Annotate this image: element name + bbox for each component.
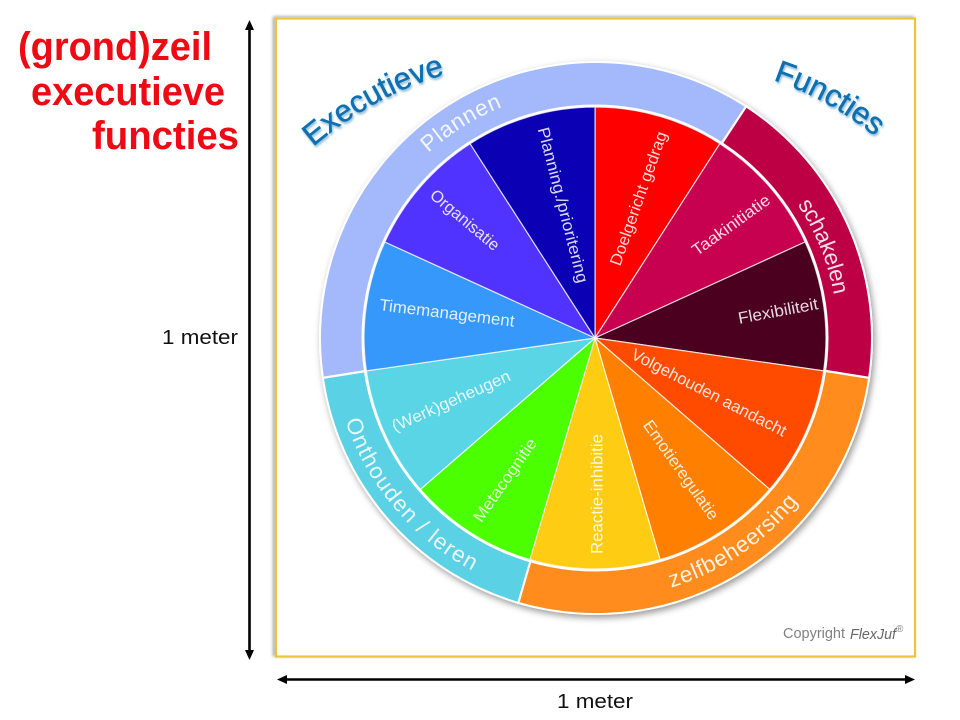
copyright: FlexJuf — [850, 626, 898, 643]
ring text: zelfbeheersing: zelfbeheersing — [668, 495, 800, 588]
segment: Reactie-inhibitie — [530, 338, 660, 569]
outer ring: zelfbeheersing — [518, 371, 868, 613]
arrow: vertical 1 meter — [245, 20, 254, 660]
segment: (Werk)geheugen — [366, 338, 595, 489]
text: Organisatie: Organisatie — [426, 186, 503, 255]
segment: Doelgericht gedrag — [595, 107, 720, 338]
text: Reactie-inhibitie: Reactie-inhibitie — [588, 434, 606, 554]
segment: Emotieregulatie — [595, 338, 770, 560]
copyright — [783, 624, 904, 643]
ring text: Onthouden / leren: Onthouden / leren — [348, 418, 476, 570]
text: Flexibiliteit: Flexibiliteit — [737, 295, 820, 328]
text: Metacognitie: Metacognitie — [470, 435, 541, 526]
text: Planning./prioritering: Planning./prioritering — [534, 125, 591, 285]
wheel base — [319, 61, 873, 615]
text: Timemanagement: Timemanagement — [378, 296, 516, 331]
title: functies — [92, 114, 239, 158]
segment: Planning./prioritering — [470, 107, 595, 338]
text: Taakinitiatie: Taakinitiatie — [689, 191, 774, 260]
title: (grond)zeil — [18, 25, 212, 69]
outer ring: Onthouden / leren — [324, 371, 531, 602]
ring text: schakelen: schakelen — [799, 200, 845, 294]
segments — [364, 107, 826, 569]
text: Emotieregulatie: Emotieregulatie — [639, 417, 722, 524]
segment: Volgehouden aandacht — [595, 338, 824, 489]
label: horizontal 1 meter: 1 meter — [557, 691, 633, 713]
copyright: Copyright — [783, 625, 846, 642]
text: (Werk)geheugen: (Werk)geheugen — [389, 367, 513, 436]
text: Volgehouden aandacht: Volgehouden aandacht — [628, 346, 790, 441]
wheel — [316, 60, 880, 622]
title: executieve — [31, 70, 225, 114]
outer ring: Plannen — [321, 63, 746, 377]
ring dividers — [322, 105, 870, 604]
outer ring — [321, 63, 871, 613]
ring labels — [348, 97, 845, 588]
segment: Taakinitiatie — [595, 144, 805, 338]
label: vertical 1 meter: 1 meter — [162, 327, 238, 349]
copyright: ® — [896, 624, 904, 635]
outer ring: schakelen — [722, 107, 871, 377]
inner wheel base — [362, 104, 828, 572]
segment: Metacognitie — [420, 338, 595, 560]
segment: Timemanagement — [364, 242, 595, 371]
ring text: Plannen: Plannen — [420, 97, 501, 152]
heading: Executieve: Executieve — [301, 60, 444, 148]
segment: Organisatie — [385, 144, 595, 338]
arrow: horizontal 1 meter — [277, 675, 915, 684]
title — [18, 25, 239, 158]
centre highlight — [594, 336, 596, 340]
segment labels — [378, 125, 820, 554]
text: Doelgericht gedrag: Doelgericht gedrag — [607, 129, 671, 268]
segment: Flexibiliteit — [595, 242, 826, 371]
heading: Functies: Functies — [775, 60, 885, 138]
frame — [276, 18, 915, 656]
